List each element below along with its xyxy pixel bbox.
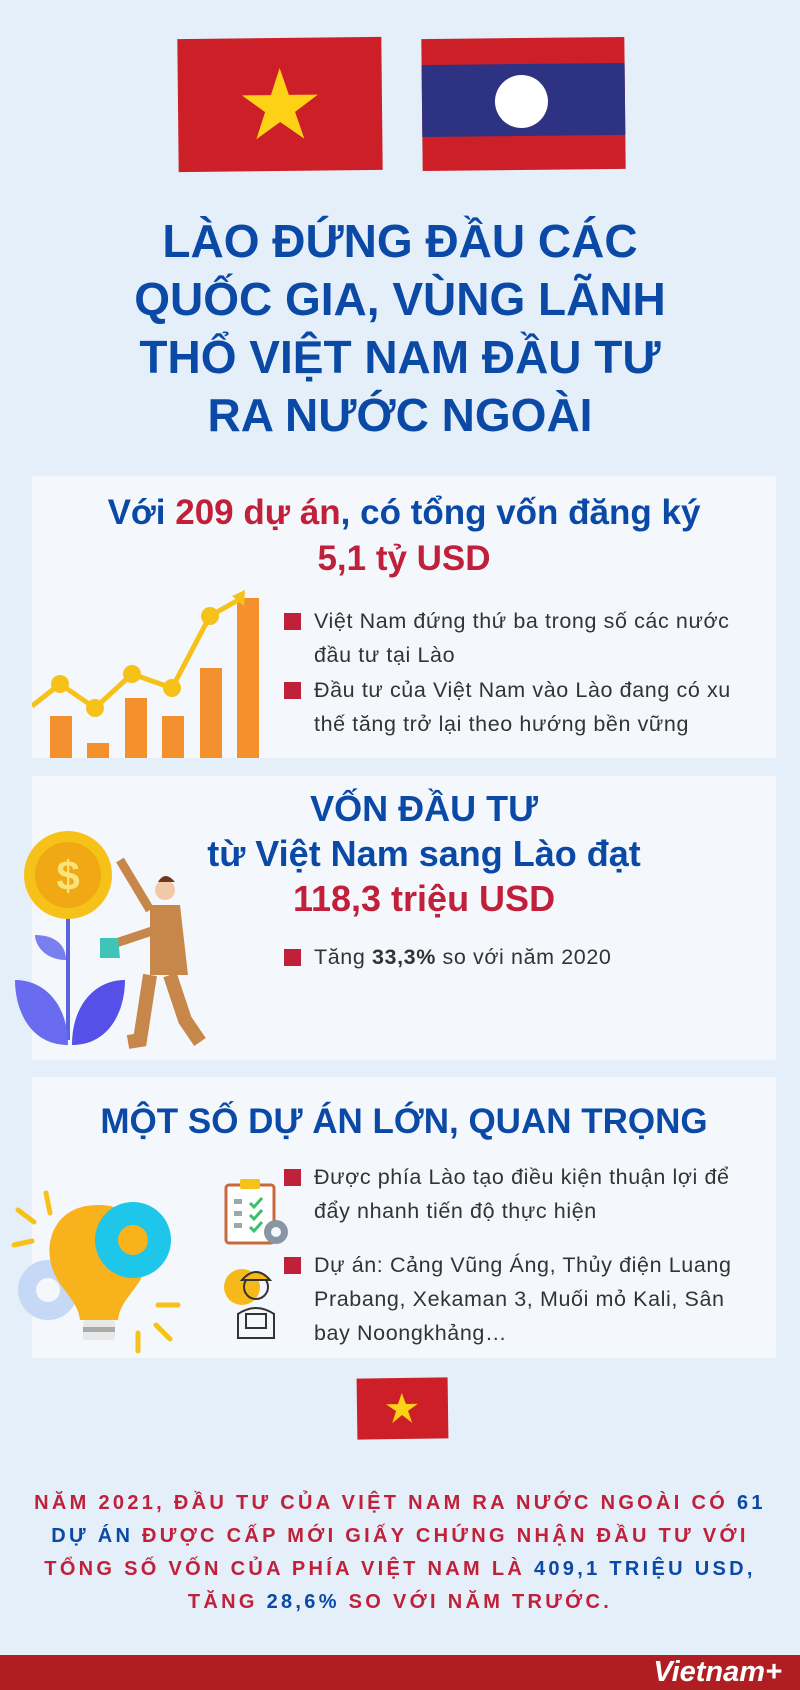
panel: major projects: Prabang, Xekaman 3, Muối mỏ Kali, Sân <box>314 1287 725 1311</box>
icon: lightbulb with gears <box>12 1190 180 1354</box>
illustration: coin plant and man <box>15 831 206 1049</box>
title <box>134 215 666 441</box>
title: QUỐC GIA, VÙNG LÃNH <box>134 273 666 325</box>
flag: Laos <box>421 37 626 171</box>
bottom summary text: DỰ ÁN ĐƯỢC CẤP MỚI GIẤY CHỨNG NHẬN ĐẦU TƯ VỚI <box>51 1525 749 1547</box>
panel: 209 projects: thế tăng trở lại theo hướng bền vững <box>314 712 689 736</box>
bullets: đẩy nhanh tiến độ thực hiện <box>314 1199 597 1223</box>
footer bar <box>0 1655 800 1690</box>
bullets <box>284 1165 730 1223</box>
heading <box>108 493 700 578</box>
panel: 209 projects: Đầu tư của Việt Nam vào Lào đang có xu <box>314 678 731 702</box>
title: RA NƯỚC NGOÀI <box>208 389 592 441</box>
bottom summary text: TỔNG SỐ VỐN CỦA PHÍA VIỆT NAM LÀ 409,1 TRIỆU USD, <box>44 1558 756 1580</box>
flag: Vietnam small <box>357 1377 448 1440</box>
icon: clipboard <box>224 1179 288 1244</box>
heading: 118,3 triệu USD <box>293 878 555 919</box>
panel: capital <box>32 776 776 1060</box>
heading: Với 209 dự án, có tổng vốn đăng ký <box>108 493 700 532</box>
bottom summary text: NĂM 2021, ĐẦU TƯ CỦA VIỆT NAM RA NƯỚC NGOÀI CÓ 61 <box>34 1492 766 1514</box>
panel: major projects <box>32 1077 776 1358</box>
bullets: đầu tư tại Lào <box>314 643 455 667</box>
title: THỔ VIỆT NAM ĐẦU TƯ <box>139 331 661 383</box>
panel: 209 projects <box>32 476 776 758</box>
panel: major projects: Dự án: Cảng Vũng Áng, Thủy điện Luang <box>314 1253 732 1277</box>
bullets: Việt Nam đứng thứ ba trong số các nước <box>314 609 730 633</box>
panel: major projects: bay Noongkhảng… <box>314 1321 507 1345</box>
chart: bars and line <box>32 590 259 758</box>
title: LÀO ĐỨNG ĐẦU CÁC <box>162 215 638 267</box>
bullet: Tăng 33,3% so với năm 2020 <box>314 945 611 969</box>
illustration: coin plant and man: $ <box>56 852 80 899</box>
bullets: Được phía Lào tạo điều kiện thuận lợi để <box>314 1165 730 1189</box>
heading <box>207 788 641 919</box>
bullets <box>284 609 730 667</box>
bottom summary text <box>34 1490 766 1613</box>
icon: worker <box>224 1269 275 1339</box>
heading: 5,1 tỷ USD <box>317 539 491 578</box>
bottom summary text: TĂNG 28,6% SO VỚI NĂM TRƯỚC. <box>188 1591 612 1613</box>
logo: Vietnam+: Vietnam+ <box>653 1656 782 1688</box>
flag: Vietnam <box>177 37 383 172</box>
heading: MỘT SỐ DỰ ÁN LỚN, QUAN TRỌNG <box>100 1102 708 1141</box>
heading: VỐN ĐẦU TƯ <box>310 788 538 829</box>
heading: từ Việt Nam sang Lào đạt <box>207 833 641 874</box>
